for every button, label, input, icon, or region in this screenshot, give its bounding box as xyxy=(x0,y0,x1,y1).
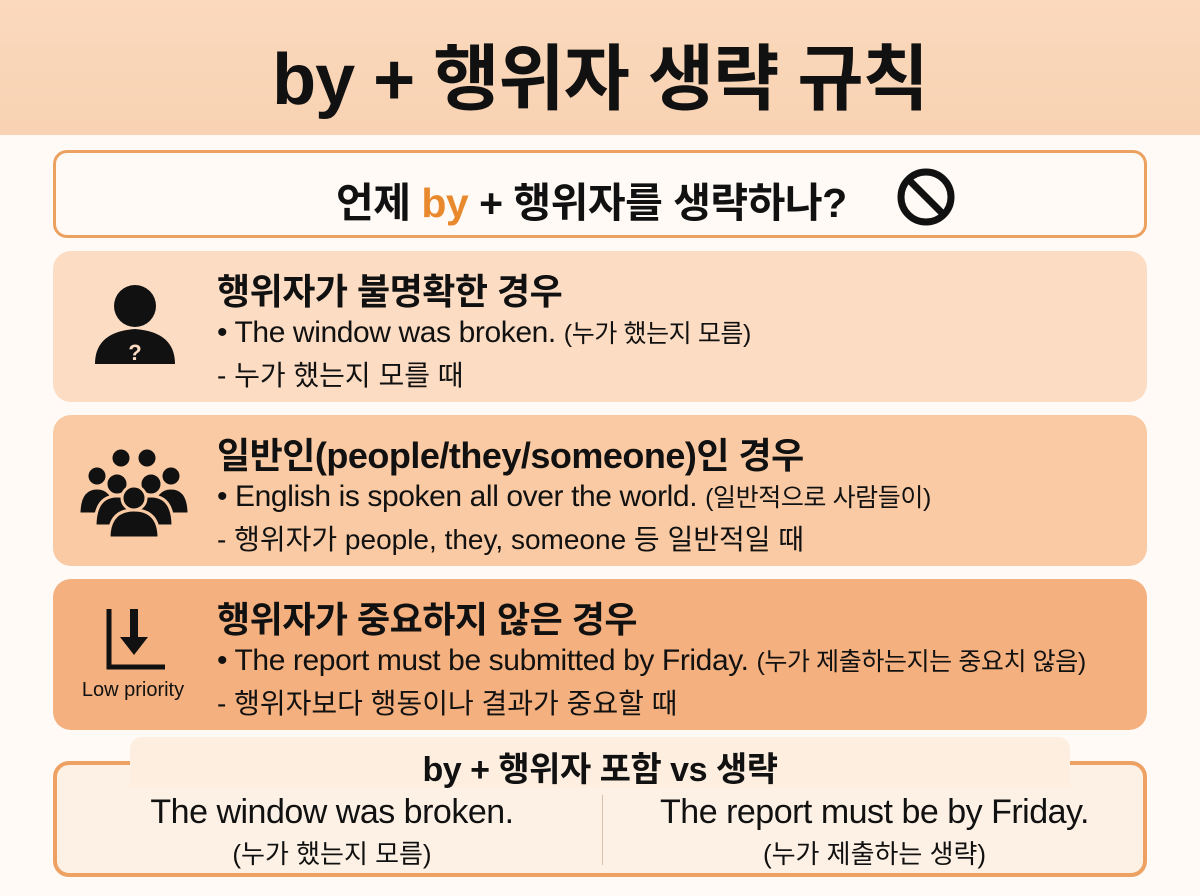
left example: The window was broken. xyxy=(150,793,514,831)
icon: low priority xyxy=(82,609,184,701)
example: • The report must be submitted by Friday. (누가 제출하는지는 중요치 않음) xyxy=(217,644,1086,677)
example: • The window was broken. (누가 했는지 모름) xyxy=(217,316,751,349)
heading: 행위자가 불명확한 경우 xyxy=(217,271,562,312)
panel: unknown agent xyxy=(53,251,1147,402)
icon: group xyxy=(80,450,188,536)
left example: (누가 했는지 모름) xyxy=(232,839,432,869)
panel: comparison xyxy=(53,761,1147,877)
note: - 누가 했는지 모를 때 xyxy=(217,360,464,391)
icon: low priority: Low priority xyxy=(82,679,184,701)
comparison heading tab xyxy=(130,737,1070,787)
heading: 행위자가 중요하지 않은 경우 xyxy=(217,599,637,640)
panel: general people xyxy=(53,415,1147,566)
question text: 언제 by + 행위자를 생략하나? xyxy=(336,180,847,226)
right example xyxy=(660,793,1089,869)
icon: person with question xyxy=(95,285,175,365)
comparison heading tab: by + 행위자 포함 vs 생략 xyxy=(422,751,778,789)
note: - 행위자가 people, they, someone 등 일반적일 때 xyxy=(217,524,804,555)
icon: prohibition xyxy=(898,168,954,226)
right example: (누가 제출하는 생략) xyxy=(763,839,986,869)
title: by + 행위자 생략 규칙 xyxy=(272,40,928,120)
panel: unimportant agent xyxy=(53,579,1147,730)
right example: The report must be by Friday. xyxy=(660,793,1089,831)
left example xyxy=(150,793,514,869)
heading: 일반인(people/they/someone)인 경우 xyxy=(217,435,804,476)
example: • English is spoken all over the world. (일반적으로 사람들이) xyxy=(217,480,931,513)
question box xyxy=(53,150,1147,238)
header band xyxy=(0,0,1200,135)
icon: person with question: ? xyxy=(128,340,142,365)
note: - 행위자보다 행동이나 결과가 중요할 때 xyxy=(217,688,677,719)
divider xyxy=(602,795,603,865)
